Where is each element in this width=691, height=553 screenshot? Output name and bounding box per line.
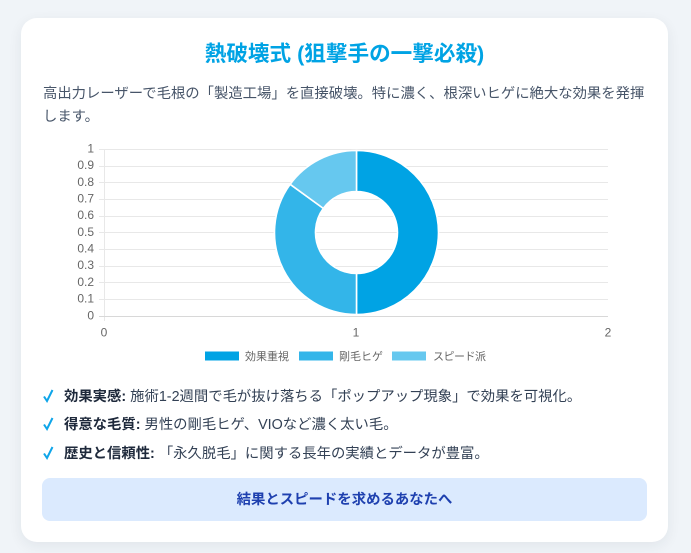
x axis labels: 0 [101, 326, 108, 340]
y axis labels: 0.4 [77, 242, 94, 256]
y axis labels: 0.6 [77, 208, 94, 222]
y axis labels: 1 [87, 142, 94, 156]
list item: hair type: 得意な毛質: 男性の剛毛ヒゲ、VIOなど濃く太い毛。 [64, 417, 398, 433]
legend [205, 349, 486, 363]
legend: スピード派 [433, 350, 486, 363]
x axis labels: 2 [605, 326, 612, 340]
x axis labels [101, 326, 612, 340]
donut segments [274, 150, 438, 314]
callout [42, 478, 647, 521]
list item: history: 歴史と信頼性: 「永久脱毛」に関する長年の実績とデータが豊富。 [64, 446, 489, 462]
callout: 結果とスピードを求めるあなたへ [237, 492, 452, 508]
y axis labels: 0.8 [77, 175, 94, 189]
y axis labels: 0 [87, 308, 94, 322]
legend: 効果重視 [245, 349, 289, 363]
y axis labels [77, 142, 94, 322]
title: 熱破壊式 (狙撃手の一撃必殺) [205, 41, 484, 66]
y axis labels: 0.1 [77, 292, 94, 306]
x axis labels: 1 [353, 326, 360, 340]
legend: 剛毛ヒゲ [339, 350, 383, 363]
donut chart [77, 142, 612, 363]
y axis labels: 0.3 [77, 258, 94, 272]
description text: 高出力レーザーで毛根の「製造工場」を直接破壊。特に濃く、根深いヒゲに絶大な効果を発揮します。 [43, 86, 644, 125]
y axis labels: 0.7 [77, 192, 94, 206]
y axis labels: 0.2 [77, 275, 94, 289]
y axis labels: 0.5 [77, 225, 94, 239]
list item: effect: 効果実感: 施術1-2週間で毛が抜け落ちる「ポップアップ現象」で効果を可視化。 [64, 389, 581, 405]
y axis labels: 0.9 [77, 158, 94, 172]
